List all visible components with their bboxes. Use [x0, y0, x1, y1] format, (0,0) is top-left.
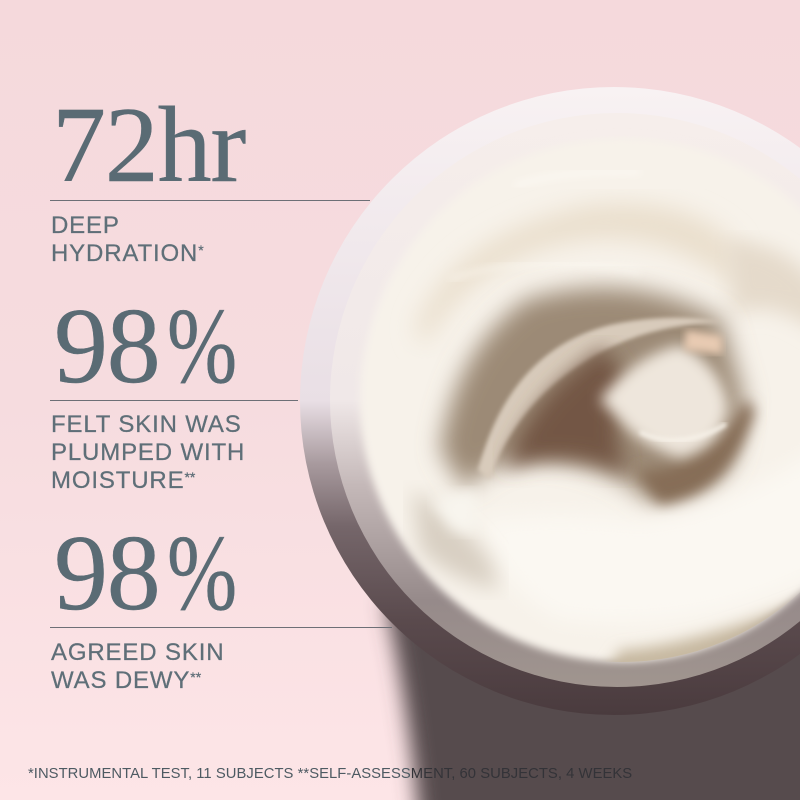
warm upper band [415, 203, 740, 345]
rule under first 98% [50, 400, 298, 401]
label: felt skin was plumped: FELT SKIN WAS [51, 411, 242, 438]
label: felt skin was plumped: MOISTURE** [51, 467, 195, 494]
cream with swirl [360, 138, 800, 680]
peach fold [684, 330, 722, 354]
label: agreed skin was dewy [50, 639, 224, 694]
rule under second 98% [50, 627, 392, 628]
label: felt skin was plumped: PLUMPED WITH [51, 439, 245, 466]
footnote: *INSTRUMENTAL TEST, 11 SUBJECTS **SELF-ASSESSMENT, 60 SUBJECTS, 4 WEEKS [28, 766, 632, 782]
highlights [515, 172, 640, 186]
stat: 98% dewy: % [167, 514, 236, 633]
product photo: cream jar on pink background [300, 87, 800, 800]
dark center [505, 348, 630, 475]
label: deep hydration [51, 212, 204, 267]
stat: 72hr: 72hr [52, 86, 245, 205]
right side tan [726, 236, 800, 328]
right and lower brown behind dollop [635, 400, 755, 505]
main shadow [440, 288, 745, 503]
warm lower edge [606, 600, 789, 662]
left notch shadow [412, 490, 500, 590]
label: felt skin was plumped [51, 411, 245, 494]
label: agreed skin was dewy: AGREED SKIN [51, 639, 224, 666]
stat: 98% plumped [54, 287, 236, 406]
jar outer rim and glass ring [300, 87, 800, 715]
cast shadow [385, 600, 800, 800]
rule under 72hr [50, 200, 370, 201]
stat: 98% plumped: % [167, 287, 236, 406]
stat: 98% plumped: 98 [54, 287, 160, 406]
label: agreed skin was dewy: WAS DEWY** [51, 667, 201, 694]
dollop [600, 345, 728, 458]
label: deep hydration: DEEP [51, 212, 120, 239]
stat: 98% dewy [54, 514, 236, 633]
lower white cream [652, 492, 800, 597]
light inner lip [478, 318, 722, 480]
label: deep hydration: HYDRATION* [51, 240, 204, 267]
stat: 98% dewy: 98 [54, 514, 160, 633]
